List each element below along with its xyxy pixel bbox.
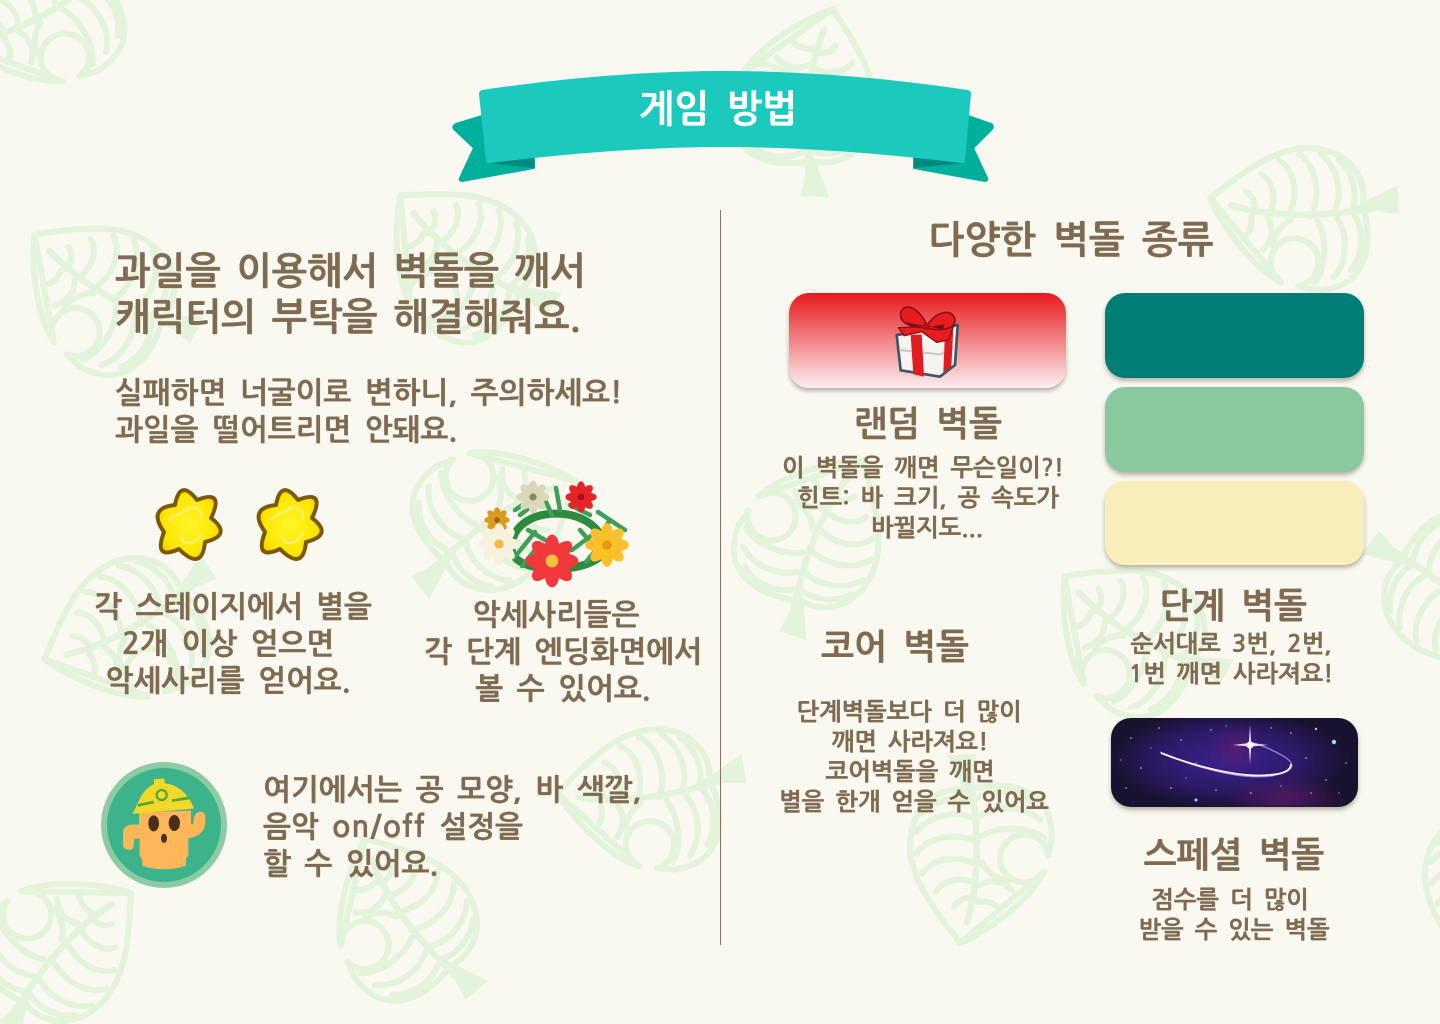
heading: left main: 캐릭터의 부탁을 해결해줘요. <box>115 298 581 336</box>
text: warning <box>115 378 622 445</box>
brick: stage dark <box>1105 293 1364 378</box>
text: stars earn accessories: 각 스테이지에서 별을 <box>94 593 372 622</box>
text: special brick description: 점수를 더 많이 <box>1151 888 1309 912</box>
text: core brick description: 단계벽돌보다 더 많이 <box>796 700 1022 724</box>
text: settings: 음악 on/off 설정을 <box>263 813 523 842</box>
text: stars earn accessories: 2개 이상 얻으면 <box>122 630 334 659</box>
heading: core brick: 코어 벽돌 <box>821 631 969 665</box>
vertical divider <box>720 210 721 945</box>
text: random brick description: 힌트: 바 크기, 공 속도가 <box>797 486 1059 510</box>
text: stage brick description: 1번 깨면 사라져요! <box>1129 662 1333 686</box>
heading: random brick: 랜덤 벽돌 <box>854 408 1002 442</box>
text: random brick description <box>782 455 1064 540</box>
text: core brick description <box>779 700 1049 814</box>
brick: special galaxy <box>1111 718 1358 807</box>
text: stage brick description <box>1129 632 1333 686</box>
heading: left main <box>115 252 585 336</box>
title ribbon banner <box>452 71 994 182</box>
text: stage brick description: 순서대로 3번, 2번, <box>1130 632 1332 656</box>
text: core brick description: 깨면 사라져요! <box>832 730 988 754</box>
text: random brick description: 이 벽돌을 깨면 무슨일이?! <box>782 456 1064 480</box>
text: stars earn accessories: 악세사리를 얻어요. <box>105 667 351 696</box>
text: core brick description: 코어벽돌을 깨면 <box>826 760 994 784</box>
text: core brick description: 별을 한개 얻을 수 있어요 <box>779 790 1049 814</box>
heading: special brick: 스페셜 벽돌 <box>1144 839 1324 873</box>
text: special brick description <box>1138 887 1330 942</box>
text: settings <box>263 774 641 879</box>
brick: stage light <box>1105 481 1364 565</box>
icon: gift box <box>895 306 959 378</box>
text: special brick description: 받을 수 있는 벽돌 <box>1138 918 1330 942</box>
text: random brick description: 바뀔지도... <box>871 516 983 540</box>
icon: flower wreath <box>478 480 629 588</box>
brick: random <box>789 293 1066 388</box>
text: warning: 실패하면 너굴이로 변하니, 주의하세요! <box>115 379 622 408</box>
text: settings: 여기에서는 공 모양, 바 색깔, <box>263 776 641 805</box>
brick: stage mid <box>1105 387 1364 472</box>
icon: two stars <box>156 488 324 561</box>
text: settings: 할 수 있어요. <box>263 850 438 879</box>
heading: brick types: 다양한 벽돌 종류 <box>928 221 1214 259</box>
text: accessories in endings <box>424 600 702 704</box>
text: accessories in endings: 각 단계 엔딩화면에서 <box>424 638 702 667</box>
text: stars earn accessories <box>94 592 372 696</box>
text: accessories in endings: 볼 수 있어요. <box>475 675 651 704</box>
icon: settings character badge <box>101 762 227 888</box>
text: accessories in endings: 악세사리들은 <box>473 601 639 630</box>
banner title: 게임 방법 <box>639 90 797 128</box>
text: warning: 과일을 떨어트리면 안돼요. <box>115 416 457 445</box>
heading: left main: 과일을 이용해서 벽돌을 깨서 <box>115 252 585 290</box>
heading: stage brick: 단계 벽돌 <box>1159 590 1307 624</box>
